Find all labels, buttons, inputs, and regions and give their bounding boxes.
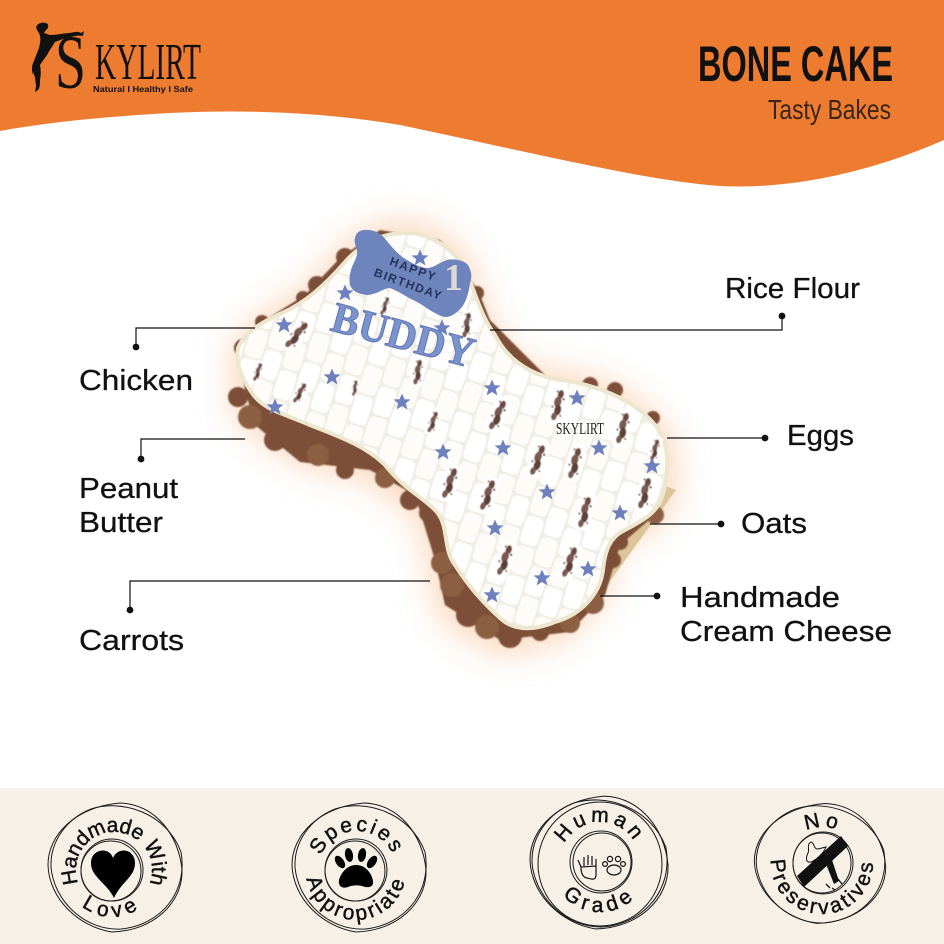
badge: Human Grade: Grade <box>566 887 632 912</box>
badge: Handmade With Love <box>48 802 183 932</box>
callout: Handmade Cream Cheese: Handmade <box>680 582 840 614</box>
callout: Peanut Butter <box>79 439 245 539</box>
cream top <box>238 233 667 628</box>
bone topper <box>350 230 471 317</box>
cake photo illustration <box>228 222 676 655</box>
icon: crossed-out dropper <box>797 836 848 890</box>
badge: Human Grade <box>530 796 669 930</box>
callout: Carrots <box>79 581 430 657</box>
biscuit base <box>228 230 664 648</box>
callout: Oats: Oats <box>741 508 807 540</box>
icon: hand and paw <box>578 855 625 879</box>
badge: Human Grade: Human <box>553 810 641 842</box>
callout: Peanut Butter: Butter <box>79 507 163 539</box>
badge: Species Appropriate: Appropriate <box>306 878 404 925</box>
icon: paw <box>333 847 379 888</box>
callout: Rice Flour: Rice Flour <box>725 273 860 305</box>
callout: Peanut Butter: Peanut <box>79 473 178 505</box>
logo wordmark: S <box>55 21 86 105</box>
logo: Skylirt: KYLIRT <box>95 34 201 91</box>
badge: Handmade With Love: Handmade With <box>61 819 168 885</box>
badge: No Preservatives: No <box>804 812 838 830</box>
badge: No Preservatives <box>754 803 886 924</box>
callout: Rice Flour <box>490 273 860 330</box>
callout: Eggs: Eggs <box>787 420 854 452</box>
logo: Skylirt <box>32 21 201 105</box>
callout: Handmade Cream Cheese <box>600 582 892 648</box>
subtitle: Tasty Bakes <box>768 94 891 125</box>
callout: Carrots: Carrots <box>79 625 184 657</box>
chocolate sprinkles <box>250 294 664 583</box>
cake glow <box>232 222 675 655</box>
orange wave header <box>0 0 944 186</box>
number one candle: 1 <box>444 257 463 299</box>
icon: dog silhouette <box>32 23 84 92</box>
badge: Handmade With Love: Love <box>82 894 136 918</box>
topper greeting: HAPPY <box>388 254 439 284</box>
callout: Chicken: Chicken <box>79 365 193 397</box>
blue stars <box>266 250 660 602</box>
cake board <box>590 480 676 595</box>
name on cake: BUDDY <box>326 294 480 377</box>
callout: Chicken <box>79 328 255 397</box>
callout: Eggs <box>667 420 854 452</box>
badge: Species Appropriate: Species <box>310 818 400 854</box>
badge: No Preservatives: Preservatives <box>770 860 874 914</box>
logo tagline: Natural I Healthy I Safe <box>93 85 194 94</box>
bone topper: BIRTHDAY <box>372 265 445 303</box>
footer band <box>0 788 944 944</box>
icon: heart <box>91 851 135 898</box>
badge: Species Appropriate <box>292 802 427 932</box>
small logo on cake: SKYLIRT <box>556 419 604 438</box>
callout: Oats <box>650 508 807 540</box>
callout: Handmade Cream Cheese: Cream Cheese <box>680 616 892 648</box>
